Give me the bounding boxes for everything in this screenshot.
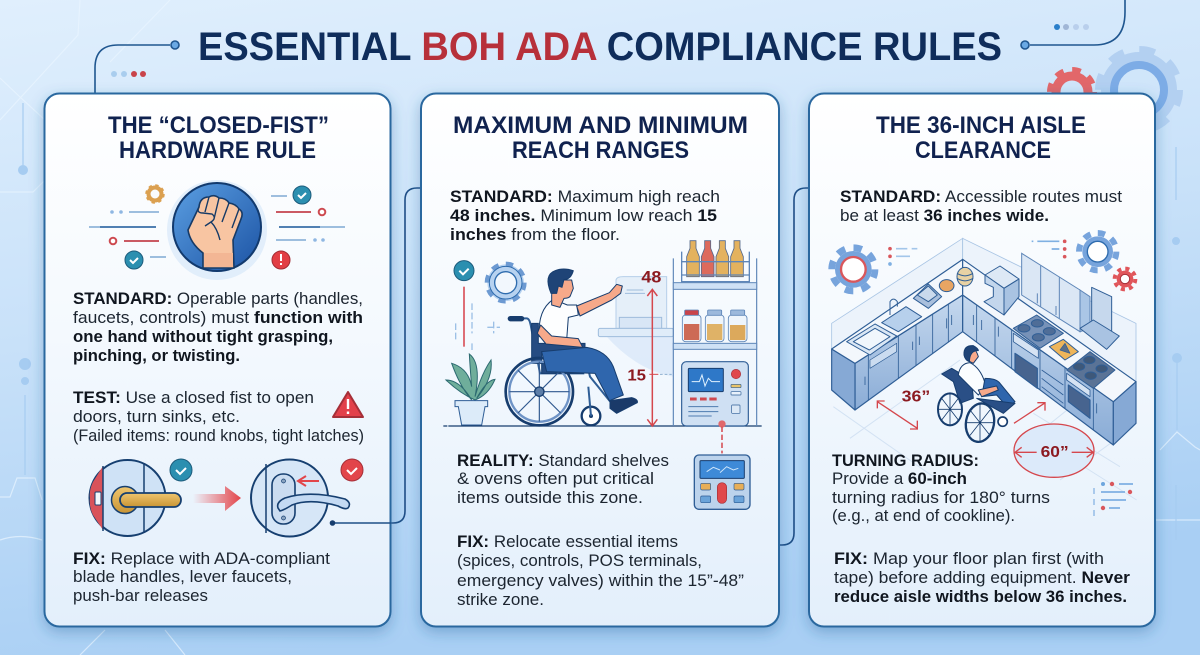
heading [876,112,1086,164]
text: fix: tape) before adding equipment. Never [834,569,1131,587]
panel: aisle clearance [809,94,1155,626]
text: standard: one hand without tight grasping, [73,328,333,346]
heading: MAXIMUM AND MINIMUM [453,112,748,139]
upper cabinets [1022,253,1090,332]
text: turning radius: Provide a 60-inch [832,470,967,488]
text: fix [834,550,1131,606]
panel: reach ranges [421,94,779,626]
title connector left [95,41,179,94]
text: fix [73,550,330,605]
connector line on card [330,520,391,526]
icon: gear [487,264,524,301]
text: turning radius: turning radius for 180° turns [832,489,1050,507]
label: 48: 48 [641,268,661,287]
text: standard: faucets, controls) must function with [73,309,363,327]
icon: check left [125,251,143,269]
text: test: TEST: Use a closed fist to open [73,389,314,407]
icon: lever handle door [251,460,349,536]
illustration: accessible kitchen [832,233,1137,500]
text: standard: pinching, or twisting. [73,347,240,365]
icon: blue gear [1079,233,1116,270]
background nodes [18,103,1182,540]
text: fix: FIX: Relocate essential items [457,533,678,551]
title: ESSENTIAL BOH ADA COMPLIANCE RULES [198,25,1002,69]
mini list right [1032,239,1066,258]
text: fix: strike zone. [457,591,544,609]
connector between card 2 and card 3 [779,188,809,545]
icon: alert dot [272,251,290,269]
text: reality: REALITY: Standard shelves [457,452,669,470]
heading [108,112,329,164]
heading: THE 36-INCH AISLE [876,112,1086,139]
icon: control panel [694,455,750,509]
icon: check [454,261,474,281]
text: test: (Failed items: round knobs, tight latches) [73,427,364,445]
text: standard [73,290,363,365]
text: reality: items outside this zone. [457,489,643,507]
label: 36 inches: 36” [902,389,930,406]
machine [682,362,748,426]
mini list left [888,247,917,266]
cabinets [832,259,1136,445]
text: standard [840,188,1122,225]
text: standard: STANDARD: Accessible routes must [840,188,1122,206]
floor tiles [833,357,1137,500]
arrow: 36 inch [877,401,1045,429]
text: standard: inches from the floor. [450,226,620,244]
icon: red gear [1115,269,1135,289]
person [537,269,637,413]
arrow: reach range [647,289,672,426]
label: 60 inches: 60” [1041,444,1069,461]
title connector right [1021,0,1125,49]
heading [453,112,748,164]
countertop appliances [847,266,1119,388]
counter [598,277,673,377]
text: standard: STANDARD: Operable parts (handles, [73,290,363,308]
heading: HARDWARE RULE [119,137,316,164]
text: turning radius [832,452,1050,525]
turning radius circle [1014,424,1094,477]
label: 15: 15 [627,367,647,384]
icon: gear with red ring [832,248,875,291]
text: fix: FIX: Replace with ADA-compliant [73,550,330,568]
text: fix: (spices, controls, POS terminals, [457,552,702,570]
bottles [687,241,743,277]
text: standard: STANDARD: Maximum high reach [450,188,720,206]
icon: teal check [170,459,192,481]
icon: red check [341,459,363,481]
heading: REACH RANGES [512,137,689,164]
text: fix: emergency valves) within the 15”-48” [457,572,744,590]
icon: closed fist with decorations [89,180,345,280]
text: fix: FIX: Map your floor plan first (with [834,550,1104,568]
indicator dots right [1054,24,1089,30]
text: standard: be at least 36 inches wide. [840,207,1049,225]
text: fix: reduce aisle widths below 36 inches. [834,588,1127,606]
text: reality: & ovens often put critical [457,470,654,488]
indicator dots left [111,71,146,77]
illustration: wheelchair reach [443,241,762,509]
text: fix [457,533,744,609]
icon: small gear [146,186,164,202]
text: turning radius: TURNING RADIUS: [832,452,979,470]
icon: round knob door [90,460,181,536]
mini list bottom [1094,482,1133,516]
icon: plant [446,354,495,425]
arrow: knob to lever [193,486,241,511]
text: test: doors, turn sinks, etc. [73,408,240,426]
heading: CLEARANCE [915,137,1051,164]
dashed red leader [718,420,726,453]
connector between card 1 and card 2 [332,188,421,523]
icon: warning triangle [333,392,363,417]
wheelchair and person [938,346,1015,444]
heading: THE “CLOSED-FIST” [108,112,329,139]
shelf unit [673,241,757,426]
text: standard [450,188,720,244]
text: fix: blade handles, lever faucets, [73,568,292,586]
icon: check right [293,186,311,204]
wheelchair [506,316,630,425]
text: standard: 48 inches. Minimum low reach 15 [450,207,717,225]
text: fix: push-bar releases [73,587,208,605]
text: test [73,389,364,445]
text: turning radius: (e.g., at end of cookline). [832,507,1015,525]
kitchen walls [832,238,1136,382]
ground line [443,424,762,428]
icon: gears top right [1050,51,1178,129]
panel: closed-fist hardware rule [44,94,391,626]
text: reality [457,452,669,507]
jars [682,310,747,342]
